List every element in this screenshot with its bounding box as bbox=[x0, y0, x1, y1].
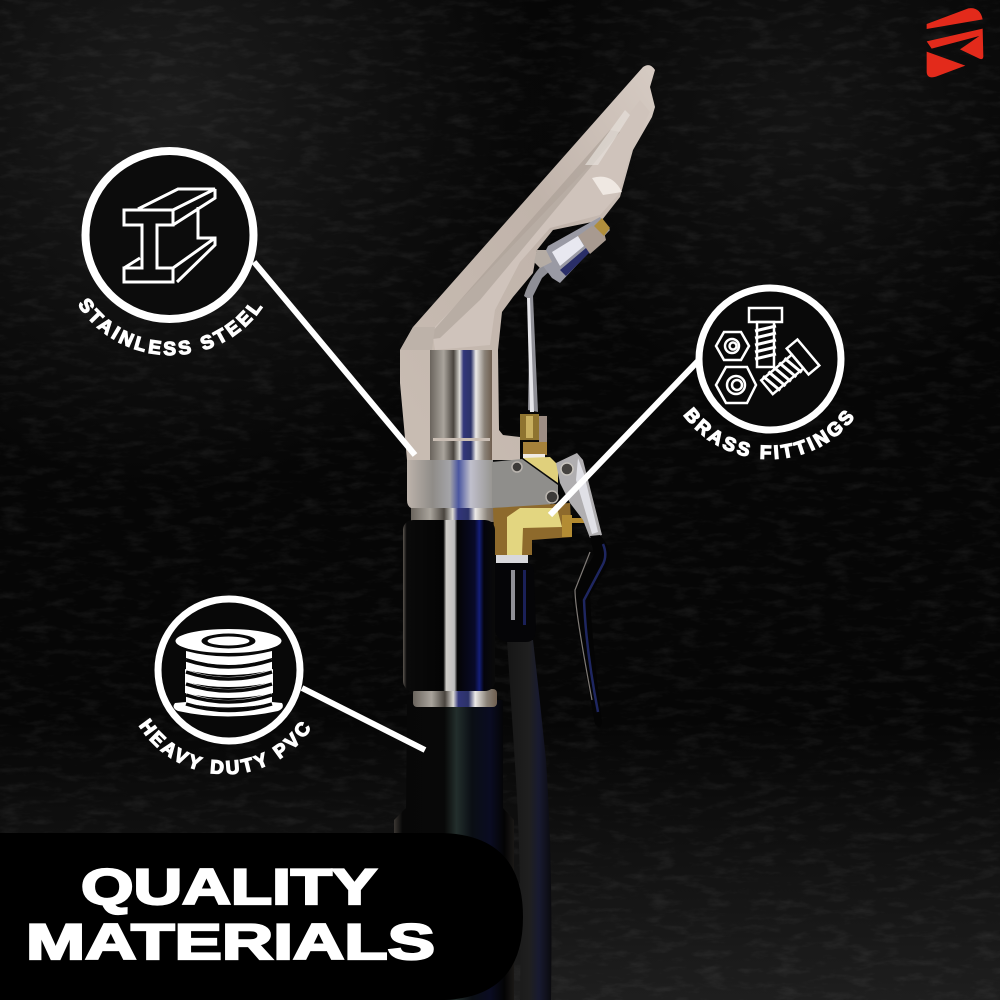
leader line bbox=[550, 361, 698, 515]
label: STAINLESS STEEL bbox=[78, 298, 264, 356]
clear nozzle head bbox=[400, 65, 655, 460]
title: quality materials: MATERIALS bbox=[26, 914, 435, 970]
head lens highlights bbox=[400, 100, 650, 350]
brass T fitting bbox=[493, 503, 585, 555]
black lever grip bbox=[572, 535, 610, 727]
icon: steel I-beam bbox=[124, 189, 215, 282]
angled bolt bbox=[756, 339, 819, 400]
title: quality materials bbox=[26, 859, 435, 970]
black hose sleeve bbox=[494, 563, 536, 642]
logo: red R mark bbox=[927, 8, 983, 77]
chrome ring under collar bbox=[411, 508, 498, 522]
icon: bolts and nuts bbox=[716, 308, 819, 403]
stainless steel tube bbox=[430, 350, 492, 462]
top bolt bbox=[749, 308, 782, 367]
callout: brass fittings bbox=[548, 284, 854, 517]
hose bbox=[507, 640, 551, 1000]
ring bbox=[86, 151, 254, 319]
tube groove bbox=[433, 438, 490, 441]
callout: stainless steel bbox=[78, 147, 418, 457]
lower nut bbox=[716, 367, 756, 403]
brass triangle bbox=[523, 457, 558, 483]
ring bbox=[158, 599, 300, 741]
ring bbox=[699, 288, 841, 430]
leader line bbox=[254, 262, 415, 455]
brass compression fitting bbox=[520, 414, 547, 458]
product: extraction wand tool bbox=[394, 65, 655, 1000]
lever plate bbox=[556, 453, 602, 538]
callout: heavy duty PVC bbox=[138, 596, 426, 775]
white ferrule bbox=[496, 555, 528, 564]
title: quality materials: QUALITY bbox=[81, 859, 377, 915]
spray jet bbox=[524, 217, 610, 412]
steel collar and plate bbox=[407, 459, 558, 508]
icon: hose spool bbox=[174, 629, 283, 716]
label: BRASS FITTINGS bbox=[682, 406, 854, 460]
label: HEAVY DUTY PVC bbox=[138, 718, 310, 775]
main black sleeve bbox=[403, 520, 495, 691]
leader line bbox=[302, 688, 425, 750]
upper nut bbox=[716, 332, 749, 360]
lower black section bbox=[394, 700, 514, 1000]
chrome ring between sleeves bbox=[413, 689, 497, 707]
title panel bbox=[0, 833, 523, 1000]
